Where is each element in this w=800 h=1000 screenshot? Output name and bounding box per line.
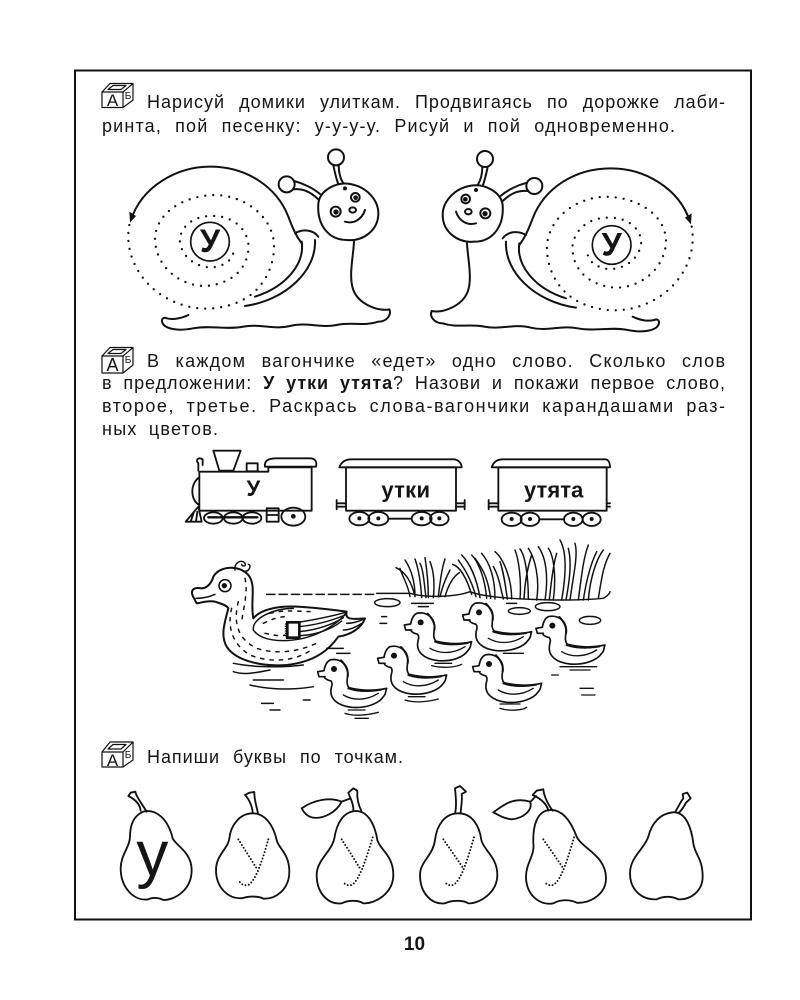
- illustration: left snail: У: [200, 222, 221, 259]
- wagon with word утята: [489, 459, 610, 526]
- locomotive with word У: [186, 451, 316, 526]
- wagon with word утки: [337, 459, 465, 525]
- icon: alphabet block 2: Б: [125, 355, 132, 366]
- duckling 3: [404, 613, 472, 667]
- icon: alphabet block 1: А: [107, 91, 119, 110]
- pear 5 with leaf: [493, 789, 606, 904]
- task 1 text: [102, 92, 725, 136]
- icon: alphabet block 3: Б: [125, 750, 132, 761]
- locomotive with word У: У: [246, 476, 260, 501]
- icon: alphabet block 1: Б: [125, 91, 132, 102]
- duckling 2: [378, 646, 447, 702]
- wagon with word утята: утята: [524, 477, 584, 502]
- wagon with word утки: утки: [381, 477, 430, 502]
- illustration: right snail: У: [602, 225, 623, 262]
- illustration: duck family on pond: [192, 540, 610, 718]
- pear 2 dotted letter: [216, 792, 289, 899]
- pears row: [121, 786, 703, 904]
- pear 1 with solid letter: [121, 792, 192, 900]
- illustration: train: [186, 451, 610, 526]
- pear 1 with solid letter: у: [136, 818, 168, 890]
- illustration: left snail: [128, 149, 390, 330]
- pear 4 dotted letter: [420, 786, 497, 903]
- duckling 4: [463, 603, 532, 653]
- reeds and shore: [267, 540, 610, 624]
- illustration: right snail: [431, 151, 693, 331]
- mother duck: [192, 561, 365, 710]
- task 1 text: Нарисуй домики улиткам. Продвигаясь по дорожке лаби-: [147, 92, 725, 112]
- icon: alphabet block 2: А: [106, 355, 119, 375]
- task 2 text: ных цветов.: [102, 419, 218, 439]
- task 2 text: В каждом вагончике «едет» одно слово. Сколько слов: [147, 351, 725, 371]
- duckling 5: [473, 655, 542, 710]
- duckling 6: [536, 616, 605, 695]
- pear 6 empty: [630, 793, 703, 899]
- task 3 text: Напиши буквы по точкам.: [147, 747, 403, 767]
- ducklings: [318, 603, 605, 718]
- page number: 10: [404, 934, 425, 955]
- icon: alphabet block 3: А: [107, 751, 119, 770]
- task 1 text: ринта, пой песенку: у-у-у-у. Рисуй и пой одновременно.: [102, 116, 675, 136]
- page frame: [75, 70, 751, 920]
- task 2 text: [102, 351, 725, 439]
- pear 3 with leaf: [302, 788, 393, 903]
- icon: alphabet block 2: [102, 348, 133, 375]
- icon: alphabet block 1: [102, 84, 133, 110]
- icon: alphabet block 3: [102, 742, 133, 770]
- task 2 text: второе, третье. Раскрась слова-вагончики карандашами раз-: [102, 396, 725, 416]
- duckling 1: [318, 660, 387, 718]
- task 2 text: в предложении: У утки утята? Назови и покажи первое слово,: [102, 373, 725, 393]
